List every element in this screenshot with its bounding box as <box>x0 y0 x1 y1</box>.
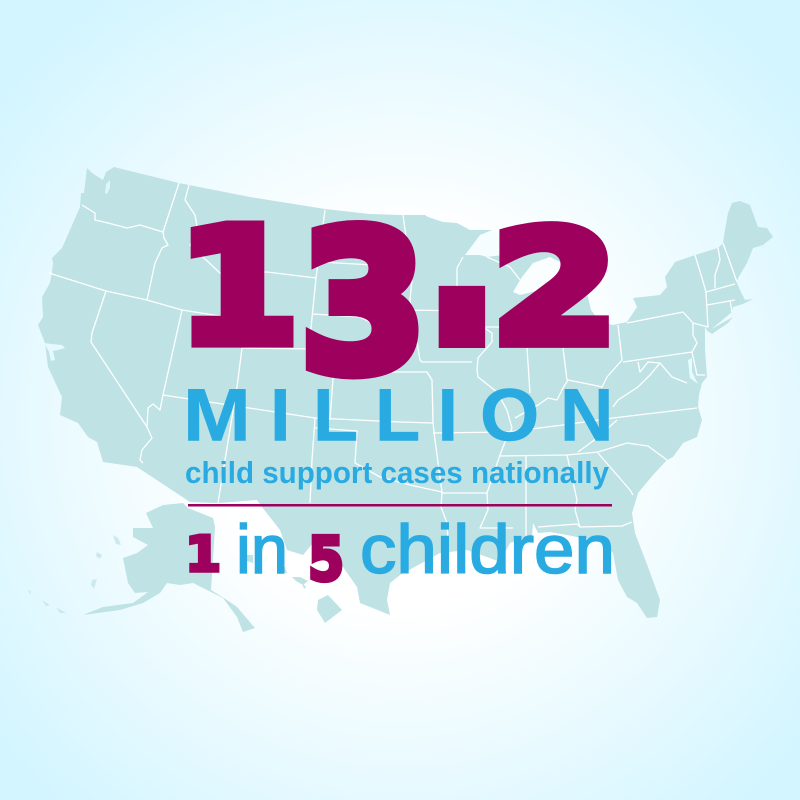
numeral 1: 1 <box>185 525 221 583</box>
subheading: child support cases nationally <box>185 455 610 490</box>
heading: MILLION: O <box>480 374 539 456</box>
map: puget sound <box>105 180 110 194</box>
word: in: in <box>236 511 288 588</box>
headline number: 13.2: . <box>426 116 498 396</box>
heading: MILLION: M <box>183 375 251 457</box>
word: children: children <box>360 511 615 588</box>
map: san francisco bay <box>44 343 65 361</box>
heading: MILLION: L <box>313 374 358 456</box>
headline number: 13.2 <box>177 116 618 416</box>
map: lake superior <box>465 230 510 257</box>
headline number: 13.2: 2 <box>491 198 618 380</box>
headline number: 13.2: 3 <box>300 192 427 416</box>
map: contiguous states <box>38 167 773 618</box>
heading: MILLION <box>183 374 613 457</box>
divider line <box>188 504 612 506</box>
map: long island <box>708 317 733 334</box>
map: alaska <box>83 503 255 632</box>
map: state borders <box>49 183 737 553</box>
map: chesapeake bay <box>688 358 698 384</box>
heading: MILLION: I <box>270 374 291 456</box>
headline number: 13.2: 1 <box>177 194 299 380</box>
heading: MILLION: I <box>438 374 458 456</box>
map: United States <box>28 167 773 632</box>
numeral 5: 5 <box>308 524 344 595</box>
map: hawaii <box>247 555 342 623</box>
statistic: 1 in 5 children <box>185 511 615 595</box>
map: alaska islands <box>28 535 121 613</box>
heading: MILLION: N <box>560 374 613 456</box>
map: lake michigan <box>513 257 566 295</box>
heading: MILLION: L <box>375 374 420 456</box>
